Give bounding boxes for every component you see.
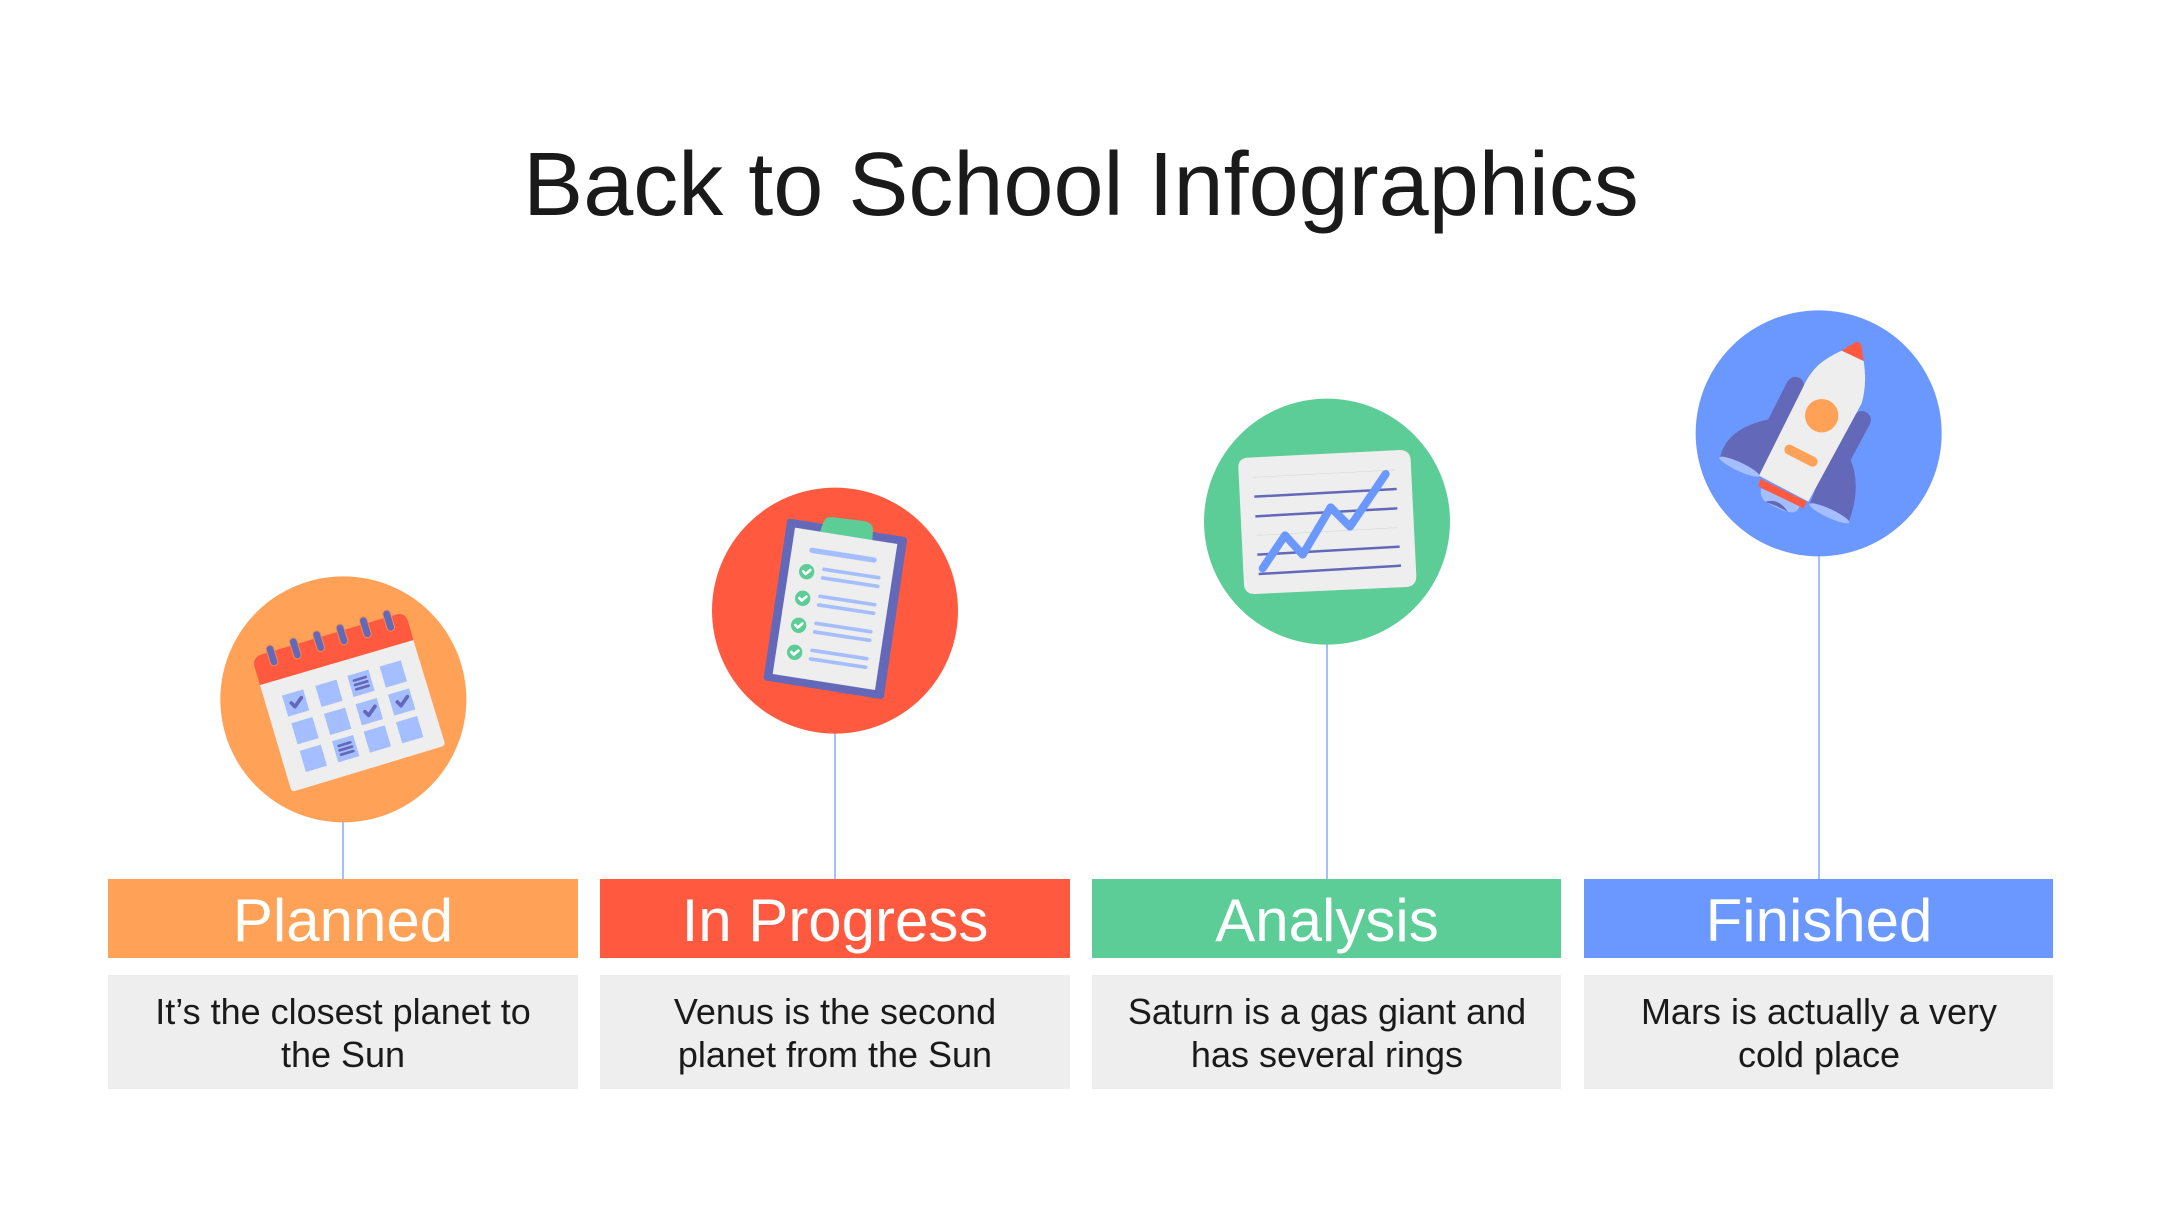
- description: planned: It’s the closest planet to: [155, 991, 531, 1032]
- label bar: planned: [108, 879, 578, 958]
- icon: line chart on green circle: [1204, 399, 1450, 645]
- description: analysis: Saturn is a gas giant and: [1128, 991, 1526, 1032]
- panel: finished: [1584, 310, 2053, 1089]
- connector: analysis: [1326, 643, 1328, 880]
- label bar: analysis: [1092, 879, 1561, 958]
- description: in progress: [600, 975, 1070, 1089]
- label bar: in progress: In Progress: [682, 887, 988, 954]
- label bar: finished: Finished: [1706, 887, 1932, 954]
- icon: calendar on orange circle: [220, 576, 466, 822]
- label bar: analysis: Analysis: [1215, 887, 1439, 954]
- panel: planned: [108, 576, 578, 1089]
- panel: analysis: [1092, 399, 1561, 1089]
- label bar: finished: [1584, 879, 2053, 958]
- description: planned: [108, 975, 578, 1089]
- connector: in progress: [834, 732, 836, 880]
- description: in progress: Venus is the second: [674, 991, 996, 1032]
- icon: rocket on blue circle: [1696, 310, 1942, 556]
- description: planned: the Sun: [281, 1034, 405, 1075]
- panel: in progress: [600, 488, 1070, 1089]
- icon: clipboard on red circle: [712, 488, 958, 734]
- title: Back to School Infographics: [523, 135, 1639, 235]
- connector: finished: [1818, 555, 1820, 880]
- description: in progress: planet from the Sun: [678, 1034, 992, 1075]
- description: analysis: [1092, 975, 1561, 1089]
- connector: planned: [342, 820, 344, 880]
- description: finished: cold place: [1738, 1034, 1900, 1075]
- label bar: in progress: [600, 879, 1070, 958]
- description: finished: [1584, 975, 2053, 1089]
- description: analysis: has several rings: [1191, 1034, 1463, 1075]
- label bar: planned: Planned: [233, 887, 453, 954]
- description: finished: Mars is actually a very: [1641, 991, 1997, 1032]
